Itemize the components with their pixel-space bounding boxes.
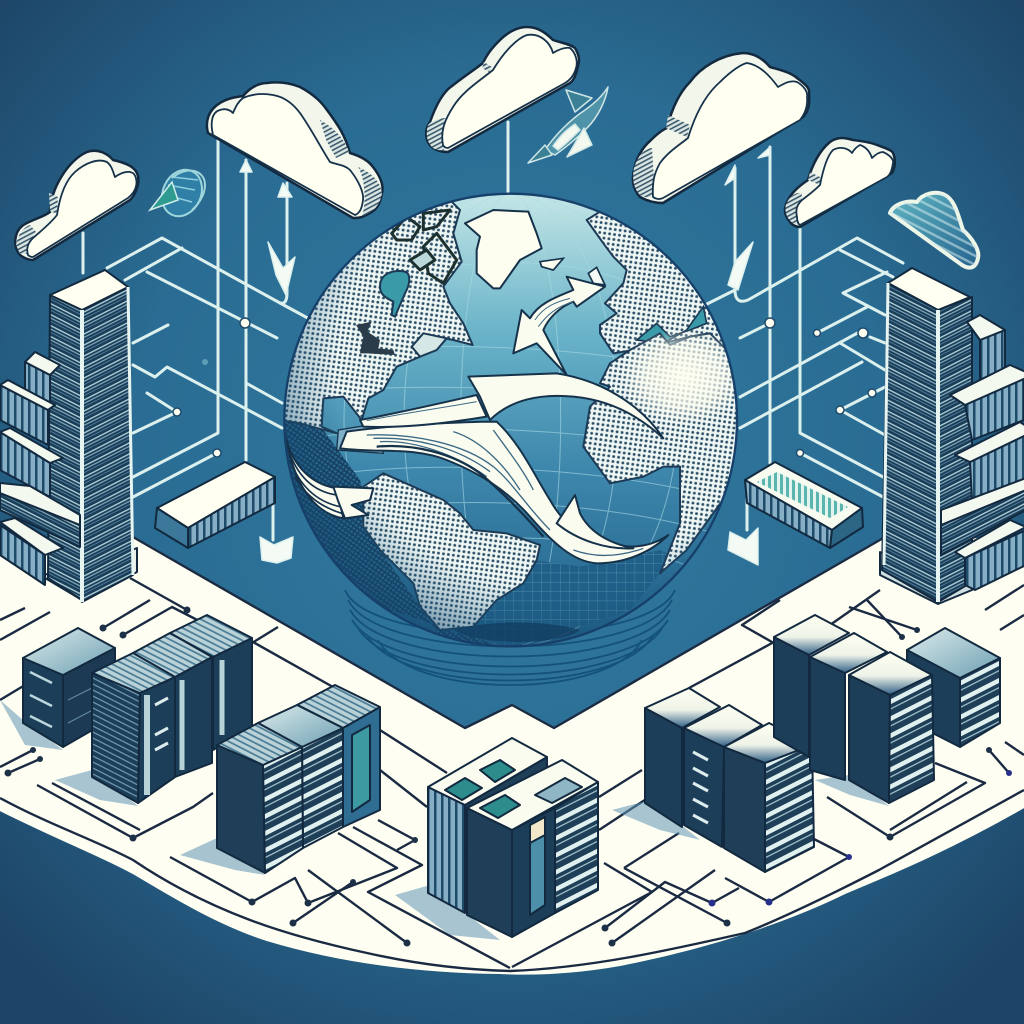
ribbon to big arrow — [360, 395, 487, 427]
south america — [363, 473, 540, 630]
icon: small planet — [150, 163, 209, 223]
floor shadows under servers — [0, 700, 889, 940]
globe — [280, 194, 753, 650]
connector nodes — [173, 318, 876, 457]
british isles — [588, 267, 605, 285]
left ribbon — [285, 433, 343, 518]
iceland — [540, 258, 563, 270]
server group: middle-left trio — [217, 685, 380, 873]
rim shading — [286, 236, 706, 645]
right tower rack — [880, 268, 972, 604]
africa — [583, 333, 747, 573]
north america — [280, 197, 473, 433]
cloud: upper right — [633, 53, 809, 203]
server group: upper-right trio — [774, 615, 934, 803]
left ribbon head — [333, 487, 373, 518]
box device: right — [745, 462, 863, 548]
small upper arrow — [513, 277, 605, 375]
big arrow head — [468, 373, 663, 438]
globe bottom shadow — [453, 622, 580, 642]
connector lines: right — [705, 147, 903, 530]
ribbon to lower arrow — [340, 422, 668, 563]
mediterranean — [637, 307, 707, 343]
left stacked shelves — [0, 352, 80, 585]
greenland — [465, 210, 542, 288]
sahara highlight — [622, 330, 734, 423]
ocean grid — [327, 195, 707, 645]
hudson bay — [380, 271, 409, 317]
cloud: upper left — [207, 82, 383, 218]
connector lines: left — [83, 122, 508, 540]
icon: rocket — [528, 87, 608, 163]
fan tail — [337, 423, 383, 453]
server group: left trio — [92, 615, 252, 803]
europe — [586, 212, 723, 354]
floor circuit nodes — [4, 606, 1012, 946]
cloud: far left — [15, 151, 138, 260]
box device: left — [155, 462, 275, 548]
great lakes — [356, 322, 395, 355]
floor panel — [0, 537, 1024, 974]
cloud: top center — [426, 27, 579, 152]
right stacked shelves — [941, 315, 1024, 590]
lower-right dark grid — [447, 550, 673, 648]
lower-left hatch — [286, 422, 492, 644]
cloud: blue outlined — [890, 193, 978, 268]
server group: middle-right trio — [645, 688, 814, 872]
cloud: small right — [785, 138, 895, 227]
server: far right unit — [907, 628, 1000, 747]
atlantic canada — [412, 333, 447, 357]
server group: center pair — [428, 738, 598, 937]
floor circuit traces: right — [512, 585, 1024, 967]
lower arrow head — [557, 495, 633, 549]
arrowheads on connectors — [240, 147, 770, 565]
floor circuit traces: left — [0, 578, 510, 968]
server: far left unit — [23, 628, 115, 747]
arctic islands — [392, 210, 457, 283]
ground shadow under globe — [345, 590, 675, 685]
left tower rack — [40, 270, 137, 602]
